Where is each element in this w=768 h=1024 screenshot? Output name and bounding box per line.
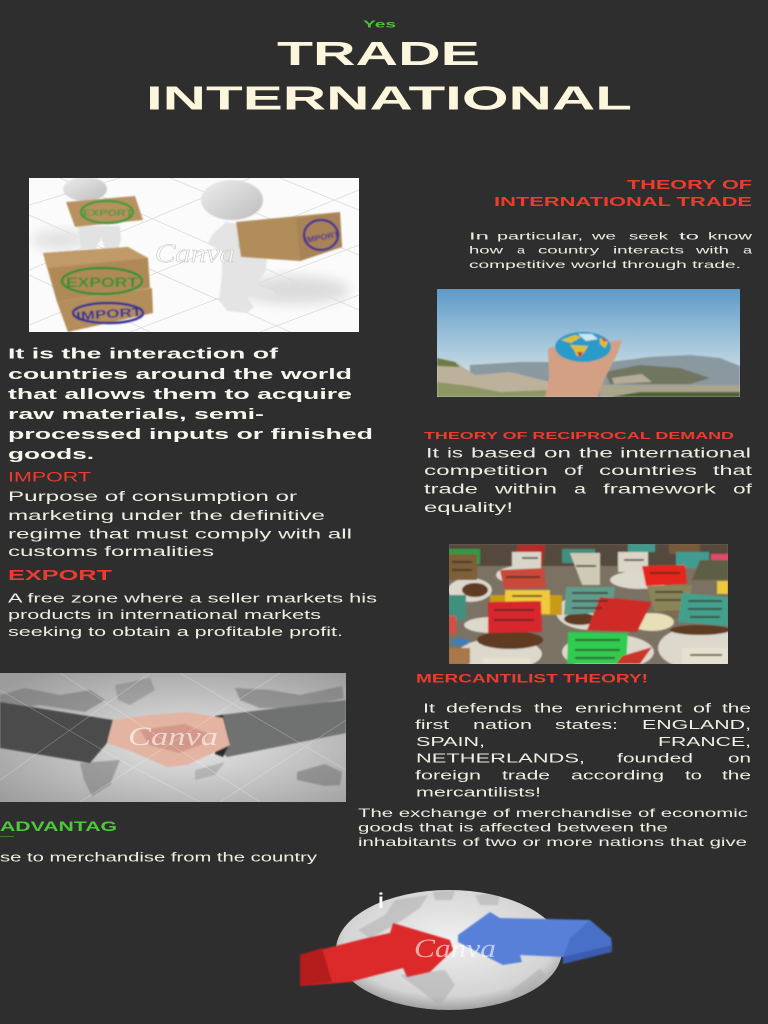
- right sleeve: [218, 700, 346, 757]
- mercantilist text: mercantilists!: [416, 786, 541, 800]
- photo: market stalls: [448, 544, 742, 670]
- international trade text: competitive world through trade.: [469, 259, 741, 271]
- heading: theory of international trade: [494, 178, 753, 209]
- reciprocal demand text: [424, 445, 752, 515]
- watermark: Canva: [414, 934, 496, 963]
- mercantilist text: of: [693, 701, 712, 715]
- blue arrow: [458, 912, 612, 965]
- import text: marketing under the definitive: [8, 508, 325, 523]
- exchange definition text: The exchange of merchandise of economic: [358, 806, 748, 820]
- sign writing: [452, 558, 722, 658]
- hand: [545, 340, 622, 397]
- heading: import: IMPORT: [8, 470, 91, 485]
- mercantilist text: founded: [617, 752, 693, 766]
- mercantilist text: defends: [446, 701, 522, 715]
- globe continents: [358, 890, 545, 1006]
- reciprocal demand text: equality!: [424, 500, 513, 515]
- title: INTERNATIONAL: [146, 79, 632, 116]
- export text: A free zone where a seller markets his: [8, 591, 377, 605]
- exchange definition text: goods that is affected between the: [358, 821, 669, 835]
- heading: advantages: ADVANTAG: [0, 819, 117, 834]
- heading: advantages: [0, 819, 117, 837]
- title: TRADE: [277, 35, 480, 72]
- advantages text: se to merchandise from the country: [0, 850, 318, 864]
- mercantilist text: trade: [502, 769, 550, 783]
- international trade text: seek: [629, 230, 669, 242]
- international trade text: particular,: [497, 230, 583, 242]
- reciprocal demand text: that: [713, 463, 752, 478]
- heading: theory of international trade: INTERNATIONAL TRADE: [494, 195, 752, 209]
- mercantilist text: It: [423, 701, 436, 715]
- intro paragraph: that allows them to acquire: [8, 386, 352, 403]
- photo: hand holding globe: [437, 289, 740, 397]
- photo: handshake over world map: Canva: [128, 722, 218, 751]
- left figure: [63, 177, 121, 249]
- reciprocal demand text: is: [447, 445, 463, 460]
- international trade text: a: [517, 244, 525, 256]
- box stack: EXPORT: [66, 274, 139, 290]
- heading: theory of international trade: THEORY OF: [627, 178, 753, 192]
- reciprocal demand text: It: [426, 445, 439, 460]
- international trade text: how: [469, 244, 504, 256]
- reciprocal demand text: international: [620, 445, 751, 460]
- heading: mercantilist theory: MERCANTILIST THEORY!: [416, 674, 648, 686]
- title: [146, 35, 632, 116]
- international trade text: to: [679, 230, 699, 242]
- international trade text: country: [538, 244, 600, 256]
- yellow basket: [490, 595, 562, 615]
- import text: Purpose of consumption or: [8, 489, 298, 504]
- mercantilist text: [415, 701, 751, 800]
- mercantilist text: enrichment: [575, 701, 683, 715]
- mercantilist text: nation: [473, 718, 532, 732]
- international trade text: [469, 230, 753, 271]
- international trade text: we: [590, 230, 616, 242]
- mercantilist text: according: [571, 769, 664, 783]
- international trade text: with: [694, 244, 729, 256]
- reciprocal demand text: of: [564, 463, 583, 478]
- intro paragraph: raw materials, semi-: [8, 406, 264, 423]
- intro paragraph: countries around the world: [8, 366, 352, 383]
- mercantilist text: to: [685, 769, 702, 783]
- reciprocal demand text: the: [579, 445, 613, 460]
- reciprocal demand text: of: [733, 481, 752, 496]
- mercantilist text: states:: [555, 718, 618, 732]
- box stack: IMPORT: [76, 305, 143, 323]
- photo: export and import boxes: [29, 177, 359, 332]
- mercantilist text: ENGLAND,: [642, 718, 751, 732]
- export text: products in international markets: [8, 608, 321, 622]
- reciprocal demand text: countries: [599, 463, 697, 478]
- beans: [462, 583, 730, 649]
- reciprocal demand text: on: [544, 445, 571, 460]
- mercantilist text: FRANCE,: [658, 735, 751, 749]
- international trade text: interacts: [613, 244, 684, 256]
- intro paragraph: goods.: [8, 446, 94, 463]
- mercantilist text: on: [728, 752, 751, 766]
- international trade text: know: [708, 230, 753, 242]
- pale beans: [630, 613, 674, 631]
- photo: handshake over world map: [0, 673, 346, 802]
- carried export box: EXPORT: [83, 208, 134, 218]
- heading: export: EXPORT: [8, 567, 112, 584]
- heading: reciprocal demand: THEORY OF RECIPROCAL DEMAND: [424, 430, 735, 442]
- left sleeve: [0, 702, 113, 763]
- price signs: [448, 544, 729, 664]
- right figure: [200, 180, 267, 313]
- box stack: [43, 247, 153, 332]
- world map shapes: [0, 678, 344, 796]
- small globe: [555, 332, 611, 362]
- photo: export and import boxes: Canva: [155, 239, 235, 268]
- distant mountains: [470, 355, 740, 397]
- mercantilist text: the: [722, 769, 751, 783]
- clasped hands: [107, 712, 230, 767]
- mercantilist text: SPAIN,: [416, 735, 485, 749]
- globe with red and blue arrows: [300, 890, 612, 1010]
- intro paragraph: It is the interaction of: [8, 345, 280, 362]
- carried import box: IMPORT: [304, 230, 340, 245]
- stray letter i: i: [378, 890, 384, 913]
- mercantilist text: first: [415, 718, 450, 732]
- rocky hills: [437, 362, 548, 392]
- intro paragraph: processed inputs or finished: [8, 426, 373, 443]
- exchange definition text: [358, 806, 748, 849]
- international trade text: In: [469, 230, 489, 242]
- carried import box: [236, 212, 342, 261]
- reciprocal demand text: within: [493, 481, 557, 496]
- reciprocal demand text: competition: [424, 463, 548, 478]
- mercantilist text: NETHERLANDS,: [416, 752, 585, 766]
- import text: [8, 489, 352, 559]
- small label: Yes: Yes: [363, 19, 396, 31]
- import text: regime that must comply with all: [8, 526, 352, 541]
- reciprocal demand text: framework: [603, 481, 716, 496]
- mercantilist text: the: [534, 701, 563, 715]
- exchange definition text: inhabitants of two or more nations that give: [358, 835, 748, 849]
- mercantilist text: foreign: [415, 769, 481, 783]
- reciprocal demand text: based: [471, 445, 536, 460]
- reciprocal demand text: trade: [424, 481, 478, 496]
- reciprocal demand text: a: [574, 481, 587, 496]
- export text: seeking to obtain a profitable profit.: [8, 625, 343, 639]
- red arrow: [300, 923, 453, 986]
- upper stall background: [449, 544, 728, 566]
- carried export box: [66, 196, 143, 227]
- international trade text: a: [743, 244, 752, 256]
- intro paragraph: [8, 345, 373, 463]
- import text: customs formalities: [8, 544, 214, 559]
- export text: [8, 591, 377, 639]
- sacks: [449, 566, 728, 664]
- mercantilist text: the: [722, 701, 751, 715]
- shadow under figures: [240, 276, 350, 304]
